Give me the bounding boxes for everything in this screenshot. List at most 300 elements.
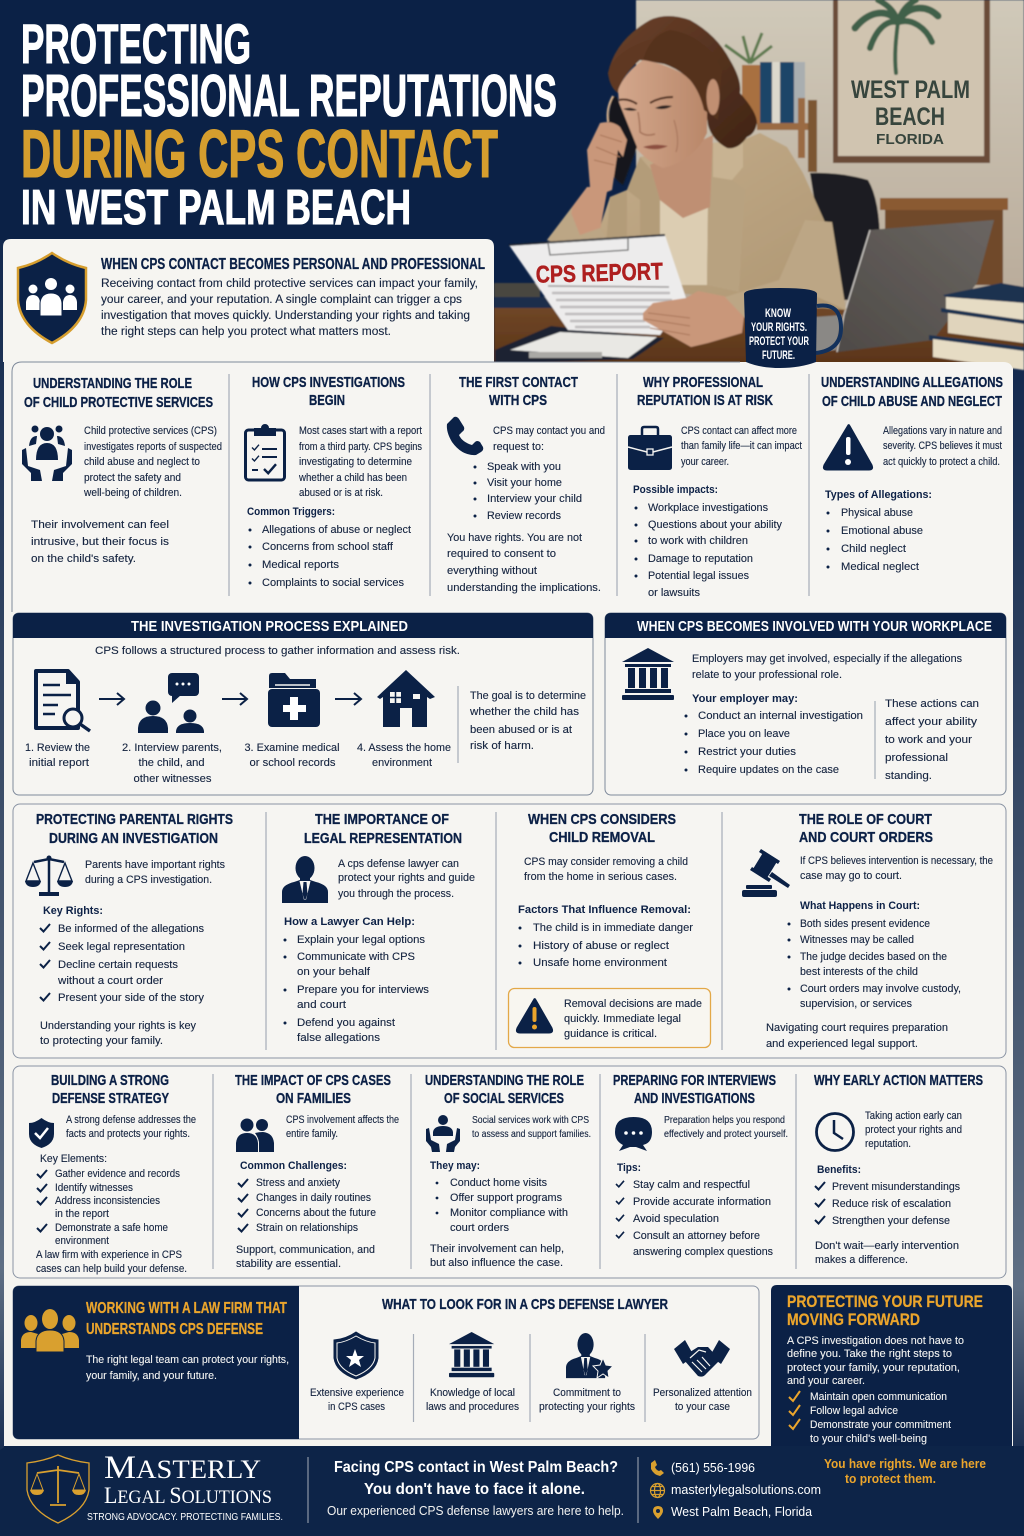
report paper: [509, 235, 686, 335]
column: allegations of abuse and neglect: act quickly to protect a child.: [883, 456, 1000, 468]
column: professional reputation at risk: than family life—it can impact: [681, 440, 802, 452]
blazer and shirt: [547, 133, 846, 310]
column: impact on families: Changes in daily routines: [256, 1192, 372, 1204]
column: role of child protective services: [22, 375, 222, 565]
logo wordmark: MASTERLY: [104, 1450, 261, 1486]
column: court and court orders: and experienced legal support.: [766, 1038, 918, 1050]
column: child removal: Factors That Influence Removal:: [518, 904, 691, 916]
column: interviews and investigations: Stay calm and respectful: [633, 1179, 750, 1191]
column: legal representation: THE IMPORTANCE OF: [315, 811, 449, 828]
icon: medical folder: [268, 673, 320, 727]
column: child removal: The child is in immediate danger: [533, 922, 693, 934]
column: parental rights: Be informed of the allegations: [58, 923, 204, 935]
column: defense strategy: Address inconsistencies: [55, 1195, 161, 1207]
column: role of child protective services: well-being of children.: [83, 487, 182, 499]
column: impact on families: Common Challenges:: [240, 1160, 347, 1172]
side note: to work and your: [885, 734, 972, 746]
goal note: whether the child has: [469, 706, 579, 718]
checklist: Demonstrate your commitment: [810, 1419, 951, 1431]
column: role of social services: UNDERSTANDING THE ROLE: [425, 1072, 584, 1089]
column: first contact with CPS: Interview your child: [487, 493, 582, 505]
icon: clock: [816, 1114, 854, 1150]
icon: briefcase: [628, 427, 672, 470]
hair back: [608, 16, 757, 148]
icon: globe: [650, 1484, 664, 1498]
column: defense strategy: Demonstrate a safe home: [55, 1222, 168, 1234]
column: legal representation: false allegations: [297, 1032, 380, 1044]
column: how investigations begin: abused or is at risk.: [299, 487, 383, 499]
step labels: 1. Review the: [25, 742, 90, 754]
item: local knowledge: laws and procedures: [426, 1401, 520, 1413]
contact details: (561) 556-1996: [671, 1460, 755, 1475]
heading: WHAT TO LOOK FOR IN A CPS DEFENSE LAWYER: [382, 1296, 668, 1313]
text block: investigation that moves quickly. Understanding your rights and taking: [101, 308, 470, 322]
column: allegations of abuse and neglect: Child neglect: [841, 543, 907, 555]
column: legal representation: on your behalf: [297, 966, 371, 978]
column: professional reputation at risk: [628, 374, 802, 599]
call to action: Facing CPS contact in West Palm Beach?: [334, 1459, 618, 1476]
column: first contact with CPS: CPS may contact you and: [493, 425, 605, 437]
column: how investigations begin: from a third party. CPS begins: [299, 441, 423, 453]
column: impact on families: THE IMPACT OF CPS CASES: [235, 1072, 391, 1089]
panel: protecting your future: [771, 1285, 1012, 1446]
column: professional reputation at risk: Questions about your ability: [648, 519, 782, 531]
call to action: You don't have to face it alone.: [364, 1481, 585, 1498]
column: role of child protective services: OF CHILD PROTECTIVE SERVICES: [24, 394, 213, 411]
column: how investigations begin: Complaints to social services: [262, 577, 404, 589]
icon: warning triangle: [823, 425, 873, 470]
heading: WHEN CPS CONTACT BECOMES PERSONAL AND PROFESSIONAL: [101, 256, 485, 273]
blazer cuff: [725, 220, 846, 318]
column: professional reputation at risk: REPUTATION IS AT RISK: [637, 392, 773, 409]
text block: define you. Take the right steps to: [787, 1348, 952, 1360]
column: defense strategy: Gather evidence and records: [55, 1168, 181, 1180]
title: [21, 12, 557, 235]
icon: house: [377, 670, 435, 727]
panel: workplace: Require updates on the case: [698, 764, 839, 776]
column: defense strategy: facts and protects your rights.: [66, 1128, 190, 1140]
text block: your career, and your reputation. A single complaint can trigger a cps: [101, 292, 462, 306]
column: legal representation: Explain your legal options: [297, 934, 425, 946]
column: court and court orders: [742, 811, 993, 1050]
column: how investigations begin: Allegations of abuse or neglect: [262, 524, 412, 536]
column: parental rights: Decline certain requests: [58, 959, 178, 971]
arrow: [222, 693, 247, 705]
column: impact on families: CPS involvement affects the: [286, 1114, 399, 1126]
item: commitment: [539, 1333, 636, 1413]
call to action: Our experienced CPS defense lawyers are here to help.: [327, 1504, 624, 1518]
column: first contact with CPS: You have rights. You are not: [447, 532, 583, 544]
icon: speech bubble: [615, 1117, 652, 1151]
column: defense strategy: A law firm with experience in CPS: [36, 1249, 182, 1261]
column: parental rights: without a court order: [57, 975, 163, 987]
contact details: West Palm Beach, Florida: [671, 1504, 813, 1519]
icon: phone: [651, 1460, 664, 1476]
heading: THE INVESTIGATION PROCESS EXPLAINED: [131, 618, 408, 635]
item: personalized attention: Personalized attention: [653, 1387, 752, 1399]
heading: WORKING WITH A LAW FIRM THAT: [86, 1300, 287, 1317]
icon: family in hands: [22, 426, 72, 481]
goal note: [469, 690, 586, 752]
column: role of social services: [425, 1072, 591, 1269]
column: impact on families: entire family.: [286, 1128, 338, 1140]
footer: [0, 1446, 1024, 1536]
item: commitment: protecting your rights: [539, 1401, 636, 1413]
column: allegations of abuse and neglect: Types of Allegations:: [825, 489, 932, 501]
coffee mug with message: KNOW: [765, 308, 791, 320]
icon: lawyer: [282, 856, 328, 903]
column: impact on families: [235, 1072, 399, 1270]
column: defense strategy: environment: [55, 1235, 109, 1247]
checklist: to your child's well-being: [810, 1433, 927, 1445]
column: parental rights: Key Rights:: [43, 905, 103, 917]
step labels: 2. Interview parents,: [122, 742, 222, 754]
panel: working with a law firm: [13, 1286, 759, 1439]
column: role of social services: but also influence the case.: [430, 1257, 563, 1269]
panel: row one, CPS basics: [12, 362, 1013, 612]
text block: Receiving contact from child protective services can impact your family,: [101, 276, 478, 290]
callout: removal warning: Removal decisions are made: [564, 998, 702, 1010]
goal note: risk of harm.: [470, 740, 534, 752]
column: role of social services: They may:: [430, 1160, 480, 1172]
column: role of social services: Their involvement can help,: [430, 1243, 564, 1255]
column: role of child protective services: intrusive, but their focus is: [31, 536, 169, 548]
side note: [885, 698, 979, 782]
arrow: [335, 693, 361, 705]
panel: workplace: [605, 613, 1006, 795]
panel: investigation process: CPS follows a structured process to gather information and assess risk.: [95, 645, 460, 657]
column: early action: protect your rights and: [865, 1124, 962, 1136]
neck: [650, 135, 713, 218]
panel: workplace: Place you on leave: [698, 728, 790, 740]
item: experience: [310, 1332, 404, 1413]
column: allegations of abuse and neglect: [821, 374, 1003, 573]
column: child removal: History of abuse or reglect: [533, 940, 670, 952]
column: role of child protective services: protect the safety and: [84, 472, 181, 484]
column: interviews and investigations: Preparation helps you respond: [664, 1115, 785, 1126]
tagline: You have rights. We are here: [824, 1456, 986, 1471]
column: child removal: from the home in serious cases.: [524, 871, 677, 883]
column: child removal: WHEN CPS CONSIDERS: [528, 811, 676, 828]
column: defense strategy: BUILDING A STRONG: [51, 1072, 169, 1089]
column: defense strategy: [29, 1072, 196, 1275]
goal note: been abused or is at: [470, 724, 573, 736]
column: how investigations begin: investigating to determine: [299, 456, 412, 468]
icon: person in hands: [426, 1115, 460, 1152]
title: DURING CPS CONTACT: [21, 116, 498, 192]
column: court and court orders: AND COURT ORDERS: [799, 829, 933, 846]
title: PROTECTING: [21, 12, 251, 75]
column: how investigations begin: Most cases start with a report: [299, 425, 422, 437]
icon: clipboard checklist: [246, 424, 284, 480]
column: impact on families: Strain on relationships: [256, 1222, 359, 1234]
checklist: Follow legal advice: [810, 1405, 898, 1417]
column: how investigations begin: BEGIN: [309, 392, 345, 409]
item: commitment: Commitment to: [553, 1387, 621, 1399]
column: early action: makes a difference.: [815, 1254, 908, 1266]
heading: UNDERSTANDS CPS DEFENSE: [86, 1321, 263, 1338]
coffee mug with message: YOUR RIGHTS.: [751, 322, 807, 334]
column: interviews and investigations: AND INVESTIGATIONS: [634, 1090, 755, 1107]
heading: PROTECTING YOUR FUTURE: [787, 1292, 983, 1311]
column: legal representation: [282, 811, 475, 1044]
item: local knowledge: [426, 1332, 520, 1413]
column: court and court orders: If CPS believes intervention is necessary, the: [800, 855, 993, 867]
column: allegations of abuse and neglect: Allegations vary in nature and: [883, 425, 1002, 437]
item: personalized attention: to your case: [675, 1401, 730, 1413]
icon: gold people: [21, 1309, 79, 1352]
title: PROFESSIONAL REPUTATIONS: [21, 63, 557, 129]
column: how investigations begin: Medical reports: [262, 559, 339, 571]
title: IN WEST PALM BEACH: [21, 181, 411, 235]
coffee mug with message: [744, 288, 841, 368]
icon: shield check: [29, 1118, 54, 1148]
column: how investigations begin: Concerns from school staff: [262, 541, 394, 553]
column: role of child protective services: UNDERSTANDING THE ROLE: [33, 375, 192, 392]
column: early action: [814, 1072, 983, 1266]
icon: gavel: [742, 849, 790, 897]
column: impact on families: stability are essential.: [236, 1258, 341, 1270]
column: professional reputation at risk: CPS contact can affect more: [681, 425, 797, 437]
goal note: The goal is to determine: [470, 690, 586, 702]
column: interviews and investigations: answering complex questions: [633, 1246, 774, 1258]
column: first contact with CPS: required to consent to: [447, 548, 556, 560]
column: first contact with CPS: Review records: [487, 510, 561, 522]
text block: [101, 276, 478, 338]
contact details: [650, 1460, 821, 1519]
column: defense strategy: cases can help build your defense.: [36, 1263, 187, 1275]
column: court and court orders: What Happens in Court:: [800, 900, 920, 912]
icon: two people: [236, 1118, 274, 1152]
column: early action: Benefits:: [817, 1164, 861, 1176]
call to action: [327, 1459, 624, 1518]
column: role of social services: to assess and support families.: [472, 1129, 591, 1140]
step labels: initial report: [29, 757, 90, 769]
column: impact on families: Concerns about the future: [256, 1207, 376, 1219]
column: allegations of abuse and neglect: Emotional abuse: [841, 525, 923, 537]
column: role of child protective services: investigates reports of suspected: [84, 441, 222, 453]
coffee mug with message: FUTURE.: [762, 350, 795, 362]
logo shield with scales: [27, 1455, 89, 1523]
text block: [86, 1354, 289, 1382]
column: court and court orders: THE ROLE OF COURT: [799, 811, 932, 828]
column: legal representation: and court: [297, 999, 347, 1011]
column: court and court orders: Both sides present evidence: [800, 918, 930, 930]
poster text: WEST PALM: [851, 76, 970, 104]
column: legal representation: A cps defense lawyer can: [338, 858, 459, 870]
icon: location pin: [653, 1506, 663, 1519]
column: role of child protective services: on the child's safety.: [31, 553, 136, 565]
column: legal representation: Defend you against: [297, 1017, 396, 1029]
column: legal representation: LEGAL REPRESENTATION: [304, 830, 462, 847]
side note: These actions can: [885, 698, 979, 710]
column: first contact with CPS: Speak with you: [487, 461, 561, 473]
column: impact on families: ON FAMILIES: [276, 1090, 351, 1107]
column: parental rights: Understanding your rights is key: [40, 1020, 196, 1032]
step labels: other witnesses: [134, 773, 212, 785]
column: first contact with CPS: understanding the implications.: [447, 582, 601, 594]
side note: professional: [885, 752, 948, 764]
step labels: environment: [372, 757, 433, 769]
face: [618, 60, 707, 168]
text block: your family, and your future.: [86, 1370, 217, 1382]
text block: the right steps can help you protect what matters most.: [101, 324, 391, 338]
poster text: [851, 76, 970, 148]
callout: removal warning: guidance is critical.: [564, 1028, 657, 1040]
column: legal representation: protect your rights and guide: [338, 872, 475, 884]
column: first contact with CPS: WITH CPS: [489, 392, 547, 409]
column: parental rights: Parents have important rights: [85, 859, 225, 871]
column: court and court orders: case may go to court.: [800, 870, 902, 882]
column: interviews and investigations: Provide accurate information: [633, 1196, 771, 1208]
column: court and court orders: supervision, or services: [800, 998, 913, 1010]
side note: standing.: [885, 770, 932, 782]
column: role of child protective services: Their involvement can feel: [31, 519, 169, 531]
contact details: masterlylegalsolutions.com: [671, 1482, 821, 1497]
item: experience: Extensive experience: [310, 1387, 404, 1399]
panel: intro: [3, 239, 494, 362]
column: allegations of abuse and neglect: Medical neglect: [841, 561, 920, 573]
side note: affect your ability: [885, 716, 977, 728]
icon: courthouse: [622, 648, 674, 700]
heading: [86, 1300, 287, 1338]
callout: removal warning: [508, 988, 710, 1048]
column: child removal: [508, 811, 710, 1048]
hand on paper: [643, 291, 744, 347]
column: court and court orders: Court orders may involve custody,: [800, 983, 961, 995]
column: role of social services: Conduct home visits: [450, 1177, 548, 1189]
column: defense strategy: A strong defense addresses the: [66, 1114, 196, 1126]
phone: [608, 96, 637, 185]
panel: workplace: Restrict your duties: [698, 746, 796, 758]
column: court and court orders: Navigating court requires preparation: [766, 1022, 948, 1034]
checklist: [789, 1391, 951, 1445]
column: defense strategy: DEFENSE STRATEGY: [52, 1090, 169, 1107]
column: parental rights: Present your side of the story: [58, 992, 204, 1004]
column: court and court orders: Witnesses may be called: [800, 934, 914, 946]
column: professional reputation at risk: Potential legal issues: [648, 570, 749, 582]
column: allegations of abuse and neglect: Physical abuse: [841, 507, 913, 519]
tagline: [824, 1456, 986, 1486]
arrow: [99, 693, 124, 705]
column: legal representation: How a Lawyer Can Help:: [284, 916, 415, 928]
text block: A CPS investigation does not have to: [787, 1335, 964, 1347]
column: first contact with CPS: Visit your home: [487, 477, 562, 489]
column: professional reputation at risk: to work with children: [648, 535, 748, 547]
icon: scales: [25, 856, 73, 896]
column: early action: Strengthen your defense: [832, 1215, 950, 1227]
callout: removal warning: quickly. Immediate legal: [564, 1013, 681, 1025]
column: parental rights: Seek legal representation: [58, 941, 185, 953]
column: defense strategy: Identify witnesses: [55, 1182, 134, 1194]
column: role of social services: Monitor compliance with: [450, 1207, 568, 1219]
column: legal representation: Communicate with CPS: [297, 951, 415, 963]
column: role of social services: court orders: [450, 1222, 510, 1234]
icon: interview people: [138, 673, 204, 733]
report title: CPS REPORT: [535, 258, 663, 289]
column: child removal: Unsafe home environment: [533, 957, 668, 969]
column: early action: reputation.: [865, 1138, 911, 1150]
item: personalized attention: [653, 1340, 752, 1413]
heading: MOVING FORWARD: [787, 1310, 920, 1329]
panel: workplace: Employers may get involved, especially if the allegations: [692, 653, 962, 665]
column: impact on families: Support, communication, and: [236, 1244, 375, 1256]
column: role of social services: OF SOCIAL SERVICES: [444, 1090, 564, 1107]
column: first contact with CPS: [447, 374, 605, 594]
column: role of child protective services: Child protective services (CPS): [84, 425, 217, 437]
text block: [787, 1335, 964, 1387]
column: how investigations begin: whether a child has been: [298, 472, 407, 484]
column: parental rights: PROTECTING PARENTAL RIGHTS: [36, 811, 233, 828]
poster text: BEACH: [875, 103, 945, 131]
column: interviews and investigations: Consult an attorney before: [633, 1230, 760, 1242]
column: interviews and investigations: PREPARING FOR INTERVIEWS: [613, 1072, 776, 1089]
clipboard under report: [495, 326, 664, 364]
column: court and court orders: The judge decides based on the: [800, 951, 947, 963]
column: legal representation: you through the process.: [338, 888, 454, 900]
step labels: 4. Assess the home: [357, 742, 451, 754]
column: how investigations begin: [246, 374, 423, 589]
column: parental rights: during a CPS investigation.: [85, 874, 212, 886]
panel: row three, rights and court: [13, 804, 1006, 1058]
panel: workplace: Conduct an internal investigation: [698, 710, 863, 722]
column: professional reputation at risk: Possible impacts:: [633, 484, 718, 496]
column: professional reputation at risk: or lawsuits: [648, 587, 700, 599]
hero photo: worried woman on phone at desk with CPS report: [494, 0, 1024, 370]
column: early action: Reduce risk of escalation: [832, 1198, 951, 1210]
checklist: Maintain open communication: [810, 1391, 947, 1403]
column: early action: Don't wait—early intervention: [815, 1240, 959, 1252]
column: defense strategy: in the report: [55, 1208, 109, 1220]
column: how investigations begin: Common Triggers:: [247, 506, 335, 518]
column: impact on families: Stress and anxiety: [256, 1177, 341, 1189]
panel: investigation process: [13, 613, 593, 795]
column: first contact with CPS: THE FIRST CONTACT: [459, 374, 578, 391]
column: professional reputation at risk: WHY PROFESSIONAL: [643, 374, 763, 391]
heading: [787, 1292, 983, 1329]
icon: phone: [447, 417, 483, 455]
column: court and court orders: best interests of the child: [800, 966, 918, 978]
books: [943, 283, 1024, 303]
arm and hand: [570, 122, 627, 237]
icon: family shield: [18, 253, 86, 343]
column: how investigations begin: HOW CPS INVESTIGATIONS: [252, 374, 405, 391]
text block: and your career.: [787, 1375, 865, 1387]
column: interviews and investigations: Avoid speculation: [633, 1213, 719, 1225]
step labels: [25, 742, 451, 785]
logo wordmark: LEGAL SOLUTIONS: [104, 1483, 272, 1508]
text block: protect your family, your reputation,: [787, 1362, 960, 1374]
column: legal representation: Prepare you for interviews: [297, 984, 429, 996]
step labels: the child, and: [138, 757, 204, 769]
column: parental rights: DURING AN INVESTIGATION: [49, 830, 218, 847]
column: professional reputation at risk: your career.: [681, 456, 729, 468]
poster text: FLORIDA: [876, 131, 944, 148]
column: child removal: CHILD REMOVAL: [549, 829, 655, 846]
panel: row four, defense and action: [13, 1066, 1006, 1278]
column: child removal: CPS may consider removing a child: [524, 856, 688, 868]
column: role of social services: Offer support programs: [450, 1192, 563, 1204]
column: professional reputation at risk: Damage to reputation: [648, 553, 753, 565]
column: interviews and investigations: Tips:: [617, 1162, 641, 1174]
column: first contact with CPS: everything without: [447, 565, 538, 577]
column: role of child protective services: child abuse and neglect to: [84, 456, 200, 468]
logo wordmark: STRONG ADVOCACY. PROTECTING FAMILIES.: [87, 1511, 283, 1523]
column: parental rights: to protecting your family.: [40, 1035, 163, 1047]
panel: workplace: relate to your professional role.: [692, 669, 842, 681]
column: early action: Taking action early can: [865, 1110, 962, 1122]
column: interviews and investigations: [613, 1072, 788, 1258]
